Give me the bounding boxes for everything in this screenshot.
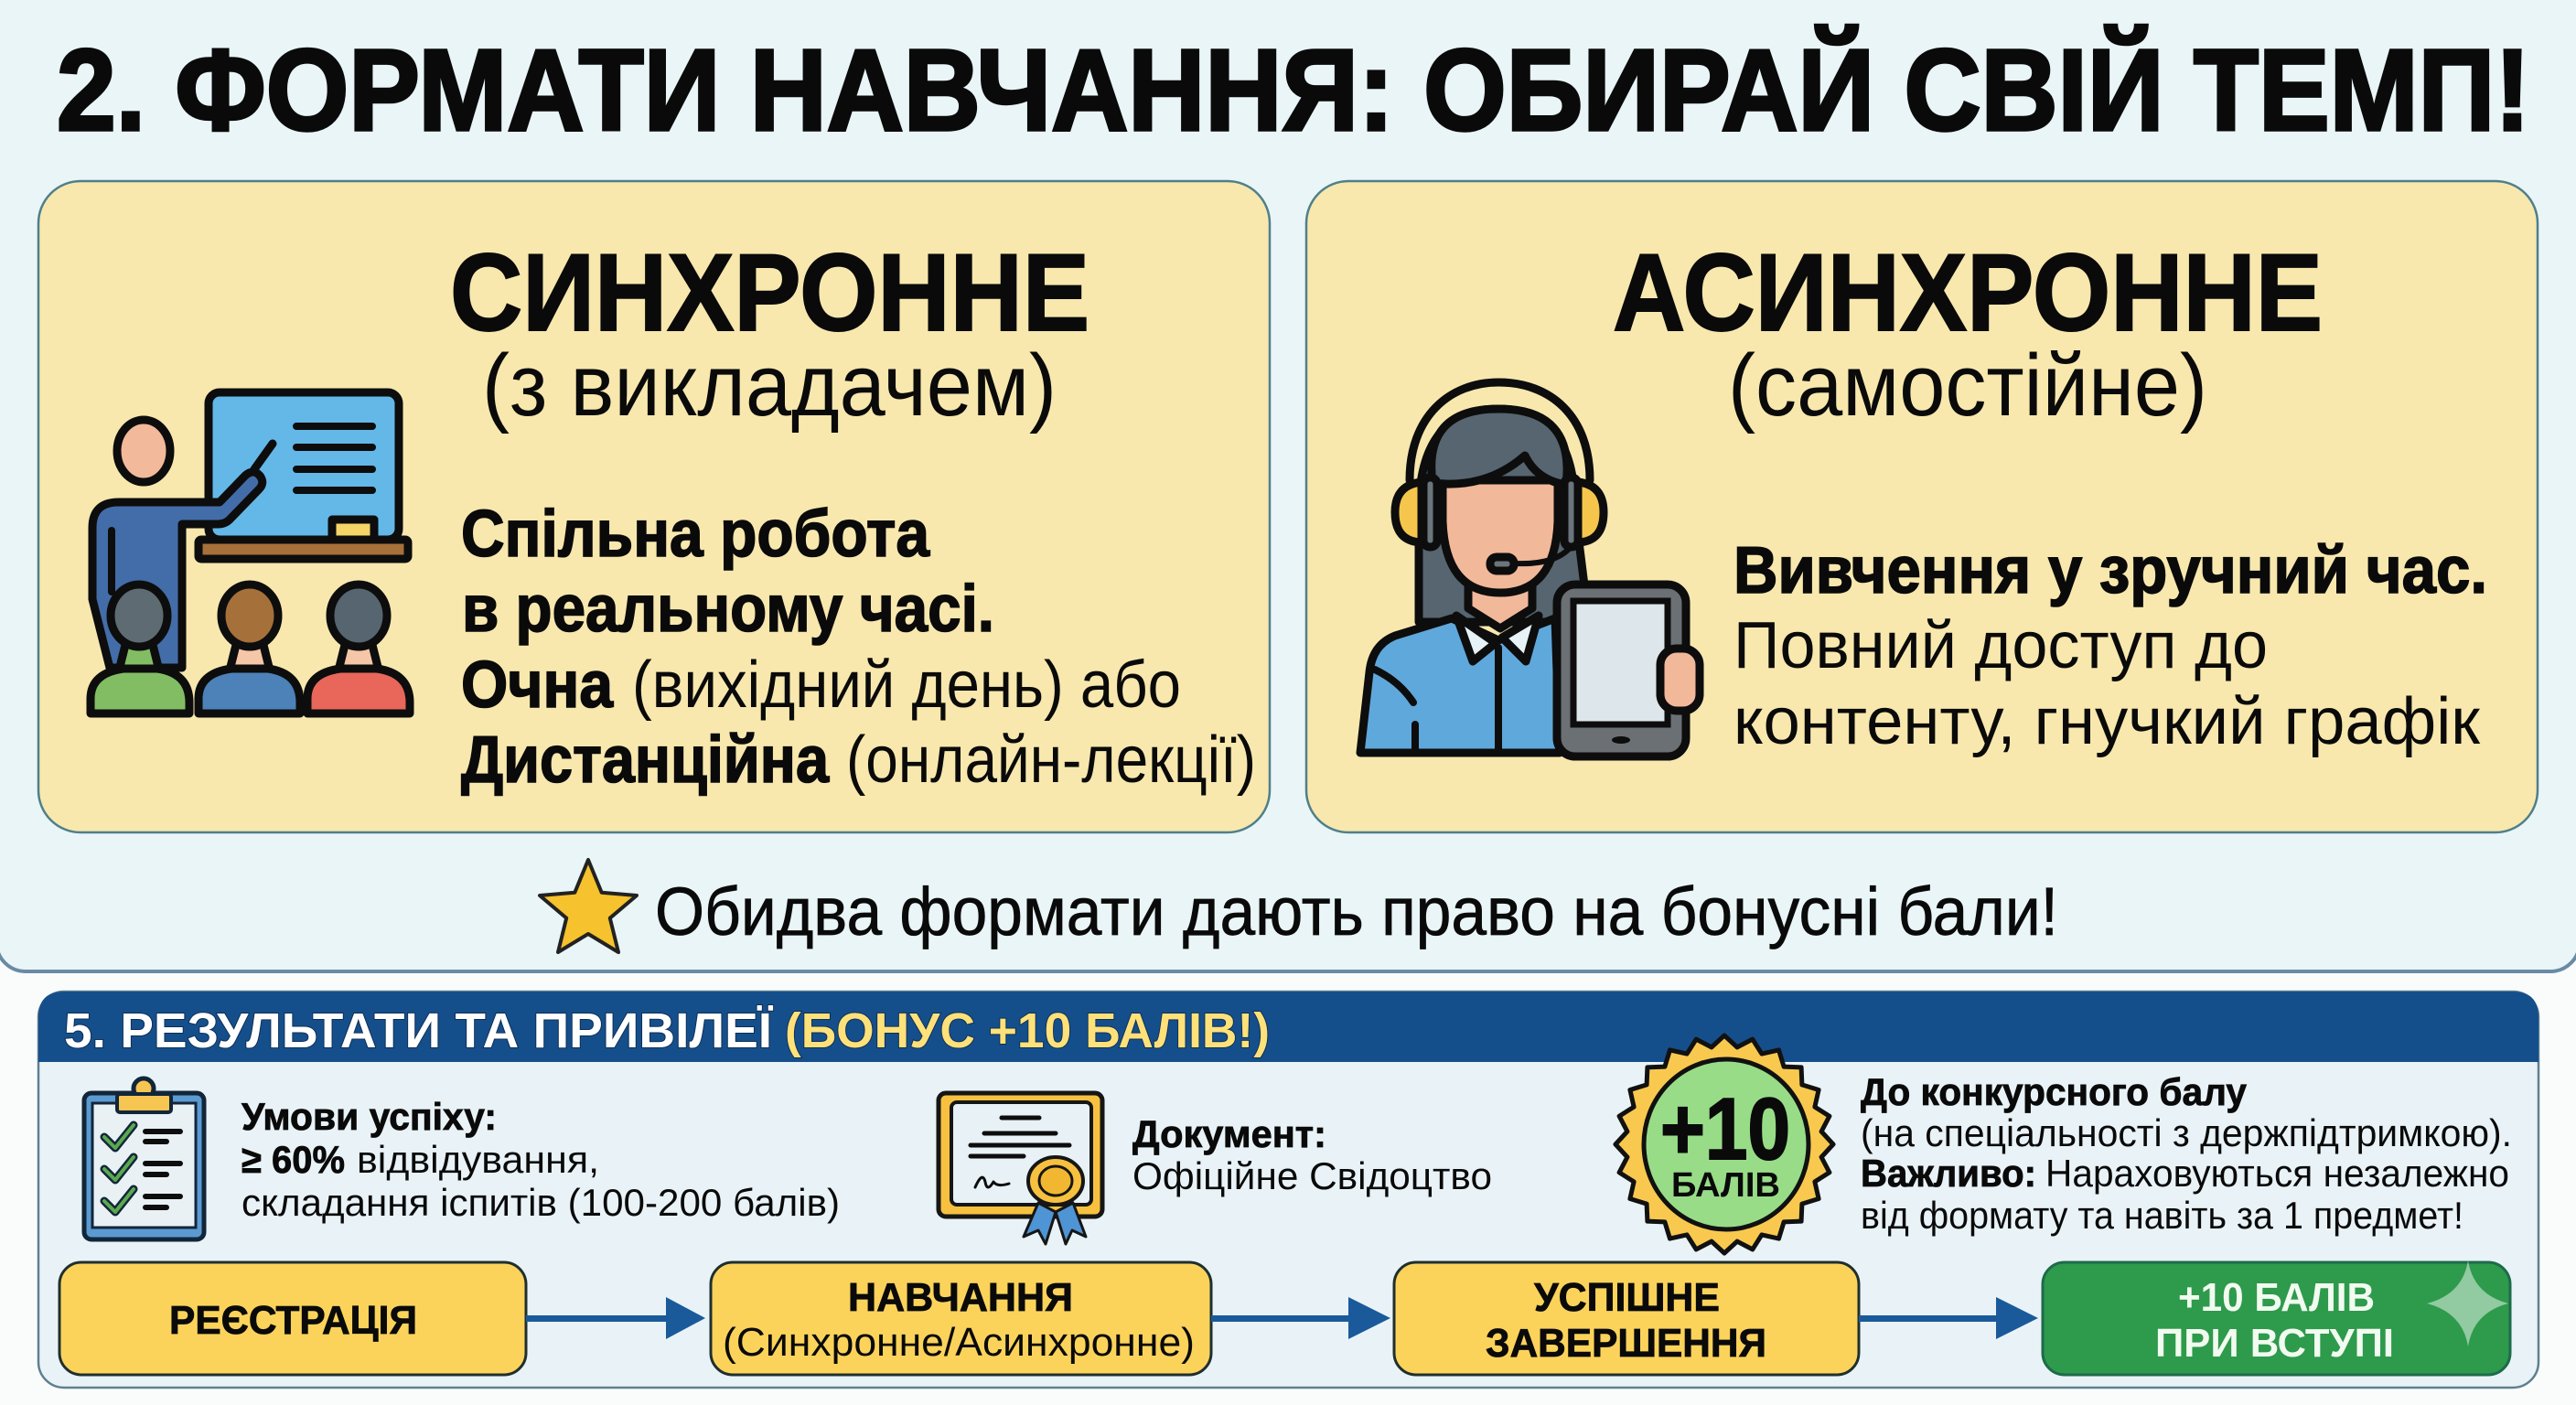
icon: plus 10 points badge bbox=[1615, 1035, 1833, 1253]
step: successful completion: УСПІШНЕ bbox=[1534, 1275, 1720, 1320]
text block: document: Офіційне Свідоцтво bbox=[1132, 1154, 1492, 1197]
header heading bbox=[64, 1003, 1270, 1058]
header band bbox=[38, 992, 2538, 1062]
header heading: 5. РЕЗУЛЬТАТИ ТА ПРИВІЛЕЇ bbox=[64, 1003, 774, 1058]
callout: bonus note bbox=[540, 860, 2058, 952]
step: successful completion: ЗАВЕРШЕННЯ bbox=[1486, 1321, 1766, 1366]
text block: success conditions: складання іспитів (100-200 балів) bbox=[242, 1181, 840, 1224]
panel: results and privileges bbox=[38, 992, 2538, 1388]
text block: success conditions: ≥ 60% bbox=[242, 1138, 345, 1181]
text block: competition score: Важливо: bbox=[1861, 1152, 2036, 1195]
icon: plus 10 points badge: БАЛІВ bbox=[1671, 1166, 1780, 1205]
step: registration bbox=[59, 1262, 526, 1375]
text block: synchronous description: (вихідний день) або bbox=[632, 649, 1181, 722]
panel background bbox=[38, 992, 2538, 1388]
text block: success conditions bbox=[242, 1095, 840, 1224]
icon: star bbox=[540, 860, 637, 952]
text block: competition score: (на спеціальності з держпідтримкою). bbox=[1861, 1111, 2512, 1154]
icon: clipboard checklist bbox=[84, 1078, 204, 1239]
text block: asynchronous description: Повний доступ до bbox=[1733, 609, 2268, 682]
text block: synchronous description: в реальному часі. bbox=[462, 573, 994, 646]
text block: asynchronous description: Вивчення у зручний час. bbox=[1733, 534, 2487, 607]
heading: asynchronous: АСИНХРОННЕ bbox=[1613, 231, 2323, 354]
text block: success conditions: відвідування, bbox=[357, 1138, 599, 1181]
text block: success conditions: Умови успіху: bbox=[242, 1095, 497, 1138]
panel background bbox=[0, 0, 2576, 971]
step: study bbox=[711, 1262, 1211, 1375]
icon: certificate bbox=[939, 1093, 1102, 1244]
text block: synchronous description: Дистанційна bbox=[461, 724, 830, 797]
text block: competition score: від формату та навіть за 1 предмет! bbox=[1861, 1194, 2463, 1237]
text block: asynchronous description bbox=[1733, 534, 2487, 758]
text block: competition score: Нараховуються незалежно bbox=[2045, 1152, 2509, 1195]
arrow: registration to study bbox=[526, 1297, 705, 1339]
subheading: independent: (самостійне) bbox=[1728, 337, 2207, 434]
step: plus 10 points on admission: ПРИ ВСТУПІ bbox=[2155, 1321, 2394, 1366]
text block: document: Документ: bbox=[1132, 1112, 1326, 1155]
bonus text: Обидва формати дають право на бонусні бали! bbox=[655, 874, 2058, 949]
arrow: study to completion bbox=[1211, 1297, 1390, 1339]
card background bbox=[38, 181, 1270, 832]
text block: competition score bbox=[1861, 1070, 2512, 1237]
step: registration: РЕЄСТРАЦІЯ bbox=[169, 1298, 417, 1343]
icon: plus 10 points badge: +10 bbox=[1660, 1080, 1790, 1178]
icon: sparkle watermark bbox=[2427, 1260, 2508, 1346]
card: asynchronous bbox=[1306, 181, 2538, 832]
text block: competition score: До конкурсного балу bbox=[1861, 1070, 2248, 1113]
card background bbox=[1306, 181, 2538, 832]
card: synchronous bbox=[38, 181, 1270, 832]
icon: teacher and students bbox=[91, 392, 410, 713]
icon: student with headset and tablet bbox=[1360, 382, 1700, 756]
arrow: completion to bonus bbox=[1859, 1297, 2038, 1339]
text block: synchronous description bbox=[461, 498, 1256, 797]
panel: learning formats bbox=[0, 0, 2576, 971]
step: plus 10 points on admission bbox=[2043, 1262, 2510, 1375]
text block: document bbox=[1132, 1112, 1492, 1197]
step: successful completion bbox=[1394, 1262, 1859, 1375]
heading: synchronous: СИНХРОННЕ bbox=[450, 231, 1089, 354]
header heading: (БОНУС +10 БАЛІВ!) bbox=[785, 1003, 1270, 1058]
step: study: (Синхронне/Асинхронне) bbox=[723, 1320, 1195, 1365]
text block: asynchronous description: контенту, гнучкий графік bbox=[1733, 685, 2480, 758]
text block: synchronous description: Спільна робота bbox=[461, 498, 930, 571]
subheading: with teacher: (з викладачем) bbox=[482, 337, 1057, 434]
step: plus 10 points on admission: +10 БАЛІВ bbox=[2178, 1275, 2375, 1320]
text block: synchronous description: (онлайн-лекції) bbox=[846, 724, 1256, 797]
step: study: НАВЧАННЯ bbox=[848, 1275, 1073, 1320]
text block: synchronous description: Очна bbox=[461, 649, 614, 722]
